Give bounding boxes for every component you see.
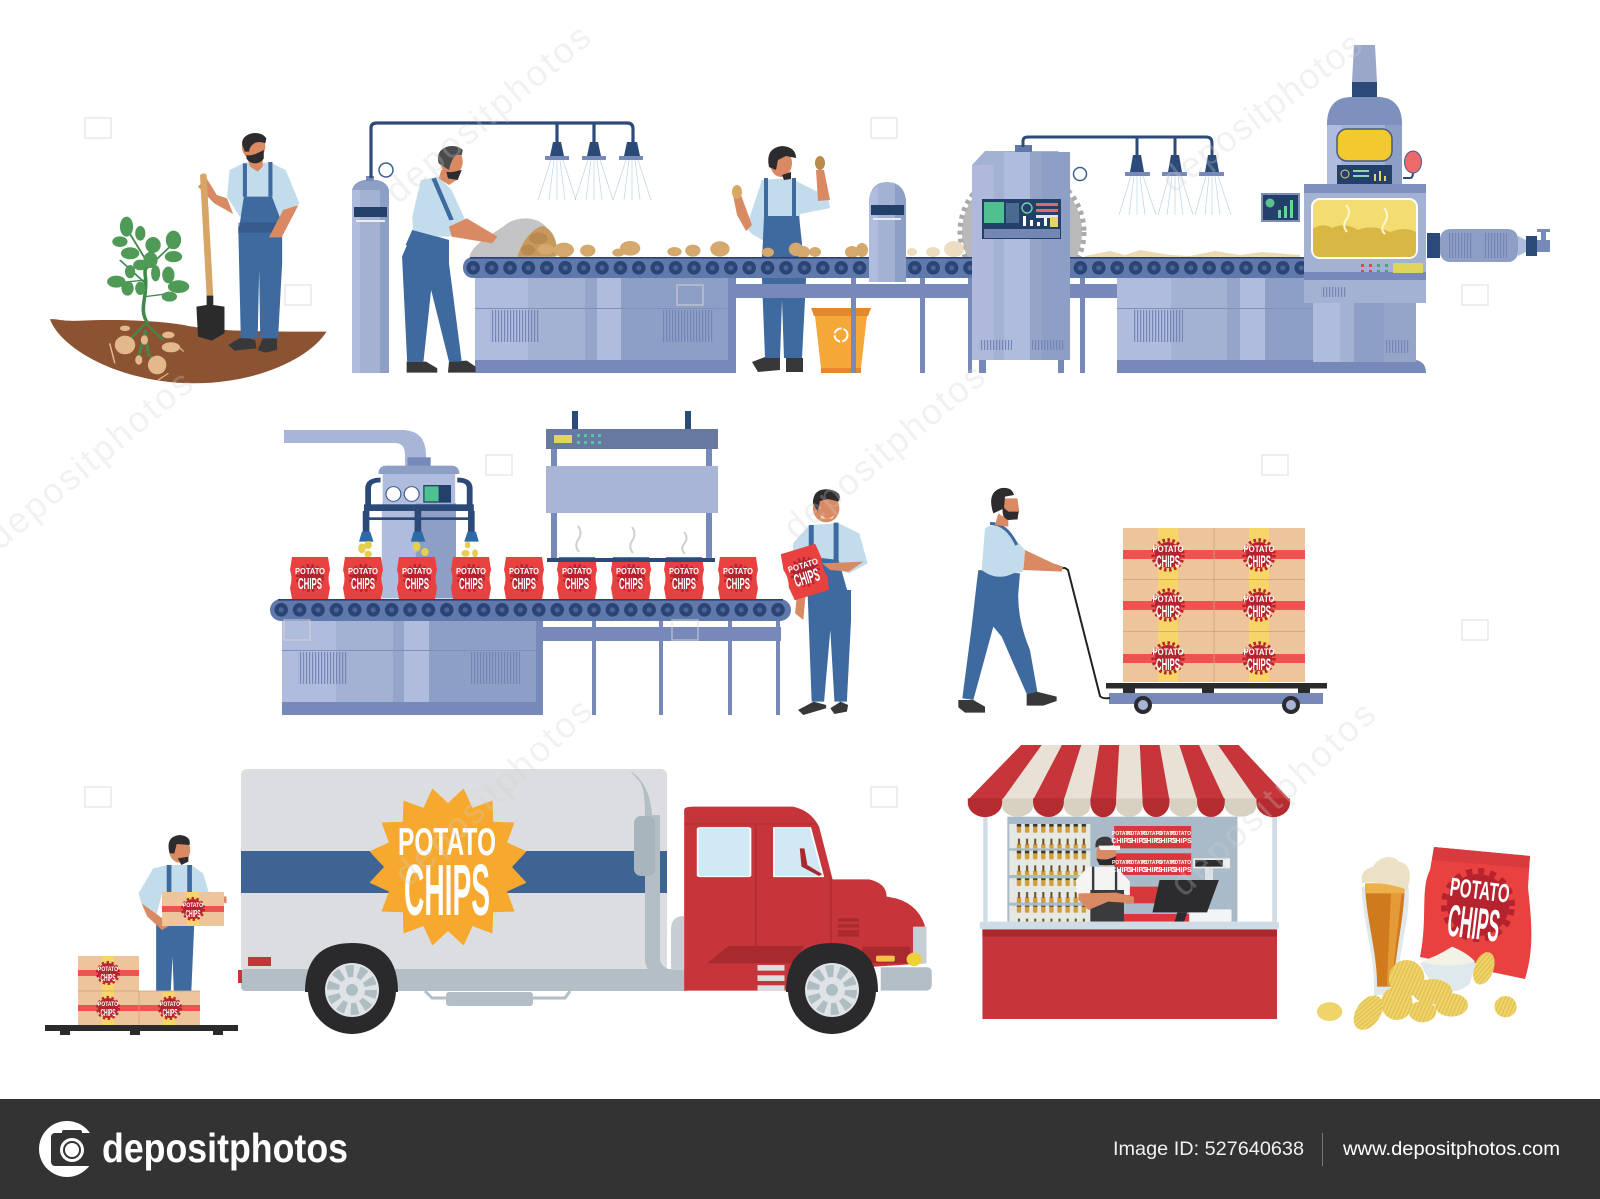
awning <box>968 745 1290 817</box>
bag 7: CHIPS <box>619 576 643 593</box>
box stack: CHIPS <box>1247 655 1271 674</box>
bag 9: POTATO <box>723 567 753 576</box>
chip packs on shelf labels: CHIPS <box>1155 867 1177 874</box>
sun badge logo: CHIPS <box>404 851 490 931</box>
chip packs on shelf labels: CHIPS <box>1155 838 1177 845</box>
bag held by worker: CHIPS <box>791 564 822 591</box>
frying machine <box>1261 45 1550 362</box>
chip packs on shelf labels: POTATO <box>1142 860 1162 866</box>
bag held by worker: POTATO <box>787 556 820 575</box>
chip packs on shelf labels: POTATO <box>1156 860 1176 866</box>
large chip bag: POTATO <box>1448 872 1511 909</box>
large chip bag <box>1420 847 1531 979</box>
chip packing machine <box>284 430 479 598</box>
box stack: CHIPS <box>1156 655 1180 674</box>
machine base one <box>475 278 736 373</box>
chip packs on shelf labels: CHIPS <box>1126 838 1148 845</box>
back wall <box>1007 817 1237 922</box>
chip packs on shelf labels: POTATO <box>1127 831 1147 837</box>
watermark overlay: depositphotos <box>775 355 993 547</box>
bag 7 <box>611 557 651 599</box>
gauge <box>1074 168 1086 180</box>
bag 5: POTATO <box>509 567 539 576</box>
sack of potatoes <box>469 218 574 257</box>
sealing press <box>546 411 718 562</box>
bag 5 <box>504 557 544 599</box>
watermark overlay: depositphotos <box>385 690 600 894</box>
table supports and legs <box>736 278 1117 373</box>
snack still life <box>1317 847 1531 1034</box>
bag 6: POTATO <box>562 567 592 576</box>
logo mark <box>39 1121 95 1177</box>
bag 4: POTATO <box>456 567 486 576</box>
chip packs on shelf labels: CHIPS <box>1170 838 1192 845</box>
bag 7: POTATO <box>616 567 646 576</box>
chip packs on shelf labels: CHIPS <box>1170 867 1192 874</box>
hopper and controls <box>358 457 479 598</box>
pressure gauge <box>379 163 393 177</box>
row of chip bags <box>290 557 758 599</box>
cash register <box>1189 858 1232 922</box>
control panel <box>982 199 1061 239</box>
tubers and roots <box>110 323 184 380</box>
box stack: POTATO <box>1152 647 1184 657</box>
delivery truck <box>238 769 932 1034</box>
chip packs on shelf labels: CHIPS <box>1141 838 1163 845</box>
worker pushing trolley <box>958 488 1063 713</box>
overhead water sprayer two <box>1023 137 1231 215</box>
box stack: POTATO <box>1152 544 1184 554</box>
cab <box>684 807 932 991</box>
cylinder tank <box>352 163 393 373</box>
stacked boxes and pallet: CHIPS <box>162 1008 178 1019</box>
conveyor belt two <box>270 599 791 621</box>
bottle shelves <box>1009 824 1090 922</box>
output pipe and valve <box>1427 229 1550 262</box>
worker holding chip bag <box>793 489 868 715</box>
box stack: CHIPS <box>1247 602 1271 621</box>
large chip bag: CHIPS <box>1445 895 1503 952</box>
site url: www.depositphotos.com <box>1342 1138 1560 1160</box>
box stack: CHIPS <box>1156 552 1180 571</box>
bag 4: CHIPS <box>459 576 483 593</box>
bag 2: CHIPS <box>351 576 375 593</box>
exhaust chimney <box>1327 45 1402 184</box>
box stack: CHIPS <box>1156 602 1180 621</box>
bag 6 <box>557 557 597 599</box>
bag 1 <box>290 557 330 599</box>
cargo box <box>238 769 691 1006</box>
watermark overlay: depositphotos <box>1153 23 1369 200</box>
red gauge <box>1403 151 1422 178</box>
posts <box>983 815 1277 922</box>
chip packs on shelf labels <box>1111 831 1192 874</box>
packing table and base <box>282 621 781 715</box>
chip packs on shelf labels: CHIPS <box>1126 867 1148 874</box>
shovel <box>196 173 224 341</box>
bag 6: CHIPS <box>565 576 589 593</box>
bag 2 <box>343 557 383 599</box>
bag held by worker <box>779 543 831 601</box>
box stack: POTATO <box>1152 594 1184 604</box>
box stack: POTATO <box>1244 544 1274 554</box>
stacked boxes and pallet: POTATO <box>160 1002 180 1008</box>
cashier <box>1076 837 1134 922</box>
operator body <box>402 146 497 373</box>
logo wordmark: depositphotos <box>102 1125 348 1171</box>
stacked boxes and pallet <box>45 956 238 1035</box>
farmer <box>198 133 299 353</box>
chips pile and dip <box>1317 947 1517 1034</box>
chip packs on shelf labels: CHIPS <box>1111 838 1133 845</box>
held box: CHIPS <box>186 909 201 920</box>
sun badge logo: POTATO <box>398 821 496 864</box>
soil mound <box>50 319 327 383</box>
chip packs on shelf labels: POTATO <box>1142 831 1162 837</box>
side monitor <box>1261 193 1300 222</box>
box stack: CHIPS <box>1247 552 1271 571</box>
stacked boxes and pallet: POTATO <box>98 1002 118 1008</box>
red chip shelves <box>1114 826 1191 922</box>
watermark overlay: depositphotos <box>1161 693 1383 904</box>
chip packs on shelf labels: CHIPS <box>1141 867 1163 874</box>
yellow observation window <box>1337 129 1392 161</box>
fryer body <box>1304 184 1426 362</box>
bag 9: CHIPS <box>726 576 750 593</box>
bag 5: CHIPS <box>512 576 536 593</box>
bag 4 <box>451 557 491 599</box>
trolley <box>1057 568 1327 714</box>
box stack: POTATO <box>1244 594 1274 604</box>
counter <box>980 922 1279 1019</box>
bag 9 <box>718 557 758 599</box>
operator loading potato sack <box>402 146 803 373</box>
watermark overlay <box>0 16 1488 904</box>
bag 8: POTATO <box>669 567 699 576</box>
pallet of boxes on trolley <box>1057 528 1327 714</box>
front wheel <box>786 943 878 1034</box>
status panel <box>1337 165 1392 184</box>
chip packs on shelf labels: POTATO <box>1112 860 1132 866</box>
chip packs on shelf labels: POTATO <box>1112 831 1132 837</box>
stacked boxes and pallet: CHIPS <box>100 973 116 984</box>
bag 1: CHIPS <box>298 576 322 593</box>
held box <box>162 892 224 926</box>
box stack <box>1123 528 1305 682</box>
worker with boxes at truck <box>45 835 238 1035</box>
overhead water sprayer one <box>371 123 651 200</box>
stacked boxes and pallet: CHIPS <box>100 1008 116 1019</box>
monitor <box>1152 880 1219 922</box>
bag 8: CHIPS <box>672 576 696 593</box>
bag 3: POTATO <box>402 567 432 576</box>
duct <box>284 430 426 466</box>
footer bar <box>0 1099 1600 1199</box>
conveyor belt one <box>463 257 1313 278</box>
machine base two <box>1117 278 1426 373</box>
chip packs on shelf labels: POTATO <box>1156 831 1176 837</box>
held box: POTATO <box>183 903 203 909</box>
potatoes on belt <box>580 241 803 257</box>
chip packs on shelf labels: POTATO <box>1127 860 1147 866</box>
worker body <box>139 835 227 991</box>
scene: potato field with farmer <box>50 133 327 383</box>
worker inspecting potatoes <box>732 146 830 372</box>
bag 1: POTATO <box>295 567 325 576</box>
image id: Image ID: 527640638 <box>1113 1138 1304 1160</box>
bag 3 <box>397 557 437 599</box>
bag 2: POTATO <box>348 567 378 576</box>
chip packs on shelf labels: CHIPS <box>1111 867 1133 874</box>
bag 3: CHIPS <box>405 576 429 593</box>
stacked boxes and pallet: POTATO <box>98 967 118 973</box>
chip packs on shelf labels: POTATO <box>1171 831 1191 837</box>
bag 8 <box>664 557 704 599</box>
market stall <box>968 745 1290 1019</box>
gear wheel <box>960 170 1084 294</box>
exhaust stack <box>631 772 690 982</box>
recycling bin <box>811 308 871 373</box>
beer glass <box>1362 857 1410 995</box>
washing machine tower <box>972 145 1086 373</box>
potatoes and slices on conveyor <box>796 241 1300 258</box>
small cylinder on line <box>869 182 906 282</box>
rear wheel <box>305 943 398 1034</box>
box stack: POTATO <box>1244 647 1274 657</box>
potato plant <box>107 217 189 323</box>
watermark overlay: depositphotos <box>377 16 598 211</box>
sun badge logo <box>370 788 526 946</box>
chip packs on shelf labels: POTATO <box>1171 860 1191 866</box>
